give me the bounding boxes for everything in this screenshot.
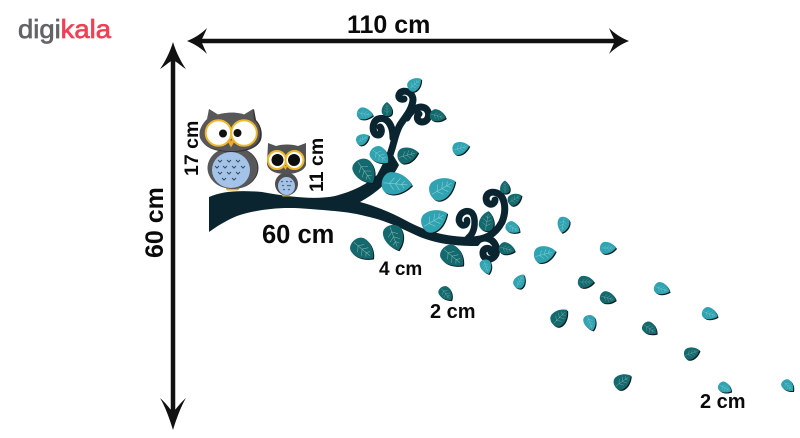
label: 110 cm: 110 cm [347, 11, 430, 39]
label: 17 cm: 17 cm [181, 121, 203, 176]
small owl: eyes [268, 151, 286, 169]
small owl: head [267, 143, 306, 174]
leaves on the branch [347, 74, 524, 276]
large owl: head [200, 109, 262, 152]
small owl: belly [278, 177, 295, 195]
branch: trunk [209, 150, 486, 246]
branch [209, 91, 505, 259]
large owl [199, 109, 262, 190]
branch: lower stem and curls [470, 192, 505, 240]
label: 11 cm: 11 cm [306, 138, 328, 192]
large owl: belly [212, 152, 250, 188]
large owl: eyes [206, 120, 231, 146]
large owl: feet [226, 185, 239, 190]
small owl [267, 143, 306, 196]
falling leaves [436, 140, 797, 396]
label: 60 cm branch length: 60 cm [262, 221, 334, 249]
label: 2 cm bottom right: 2 cm [700, 391, 746, 413]
logo: digikala: digikala [18, 14, 112, 44]
large owl: body [208, 147, 258, 189]
small owl: body [275, 172, 298, 196]
label: 4 cm: 4 cm [379, 259, 422, 280]
small owl: feet [282, 193, 290, 196]
branch: upper stem and curls [387, 91, 413, 162]
label: 2 cm near branch: 2 cm [430, 301, 476, 323]
arrow: width dimension 110 cm [187, 28, 629, 54]
large owl: feather marks [215, 160, 245, 180]
small owl: feather marks [281, 181, 292, 190]
large owl: beak [227, 140, 235, 148]
label: 60 cm vertical: 60 cm [141, 187, 169, 258]
arrow: height dimension 60 cm [160, 42, 186, 430]
small owl: beak [283, 166, 288, 170]
